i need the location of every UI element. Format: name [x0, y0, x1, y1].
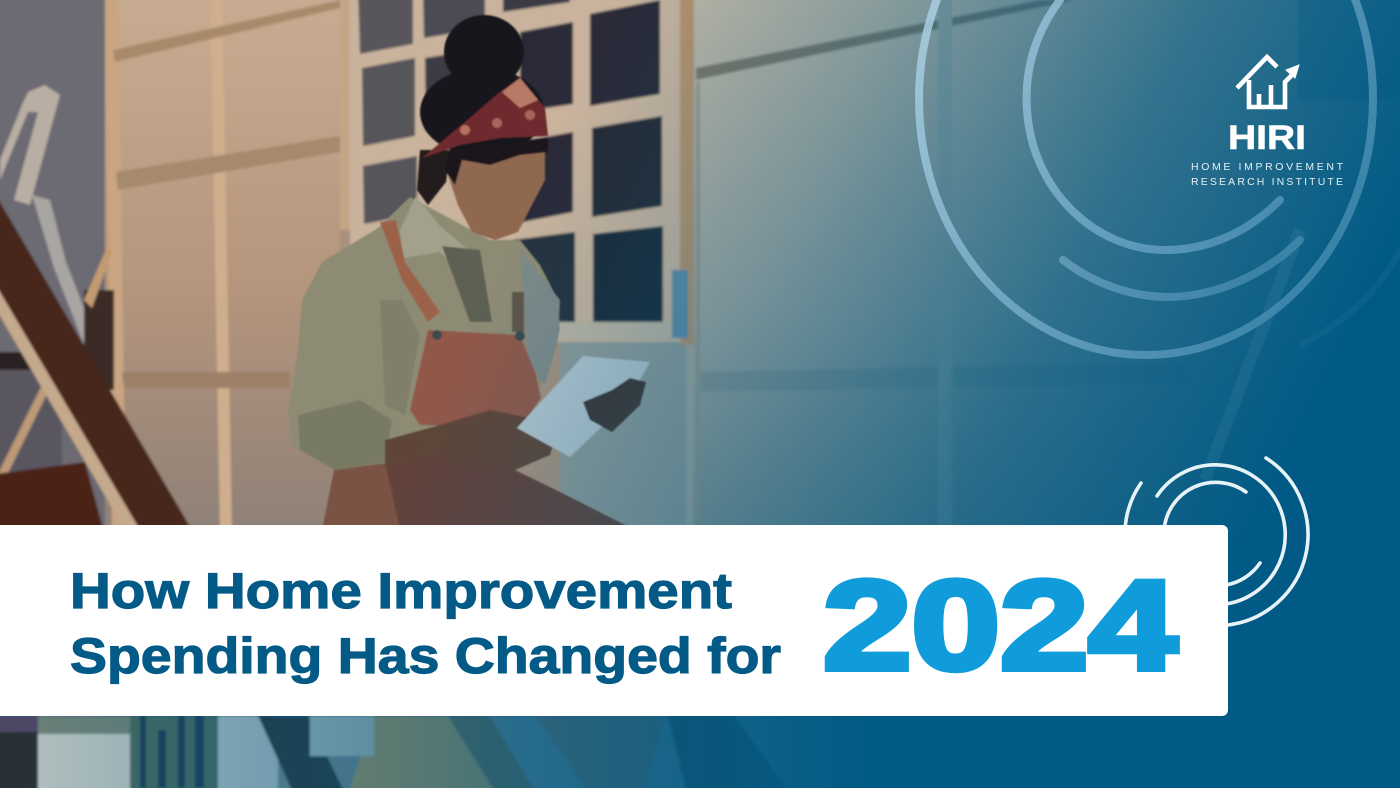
icon: house with rising chart arrow	[1237, 57, 1299, 107]
logo tagline: HOME IMPROVEMENT	[1191, 161, 1344, 173]
title banner	[0, 525, 1228, 716]
photo: woman	[288, 15, 650, 530]
bottom strip scene	[0, 716, 1400, 788]
right hand	[583, 378, 646, 432]
collar	[400, 196, 478, 290]
right wall planks	[696, 0, 1075, 80]
wood studs	[105, 0, 126, 535]
logo tagline	[1191, 161, 1344, 188]
ladder in background	[0, 85, 60, 205]
undershirt	[442, 246, 492, 322]
decorative small rings	[1125, 458, 1308, 625]
apron straps	[380, 220, 440, 322]
wooden beam foreground	[0, 168, 192, 530]
forearm sleeve	[298, 400, 392, 470]
apron lower and trousers	[322, 450, 635, 530]
apron bib	[410, 330, 541, 428]
logo: HIRI	[1191, 57, 1344, 188]
white panel	[0, 525, 1228, 716]
heading: How Home Improvement	[70, 563, 732, 619]
shirt	[288, 197, 560, 470]
window panes	[358, 0, 663, 322]
heading	[70, 563, 781, 684]
headband	[422, 78, 548, 158]
left arm and hand	[385, 410, 558, 470]
year: 2024	[823, 554, 1177, 696]
face	[448, 140, 545, 240]
tablet	[517, 356, 650, 457]
decorative large rings	[919, 0, 1373, 355]
logo wordmark: HIRI	[1228, 119, 1306, 157]
window frame	[350, 0, 682, 342]
hair	[444, 15, 524, 89]
logo tagline: RESEARCH INSTITUTE	[1191, 176, 1343, 188]
heading: Spending Has Changed for	[70, 628, 781, 684]
